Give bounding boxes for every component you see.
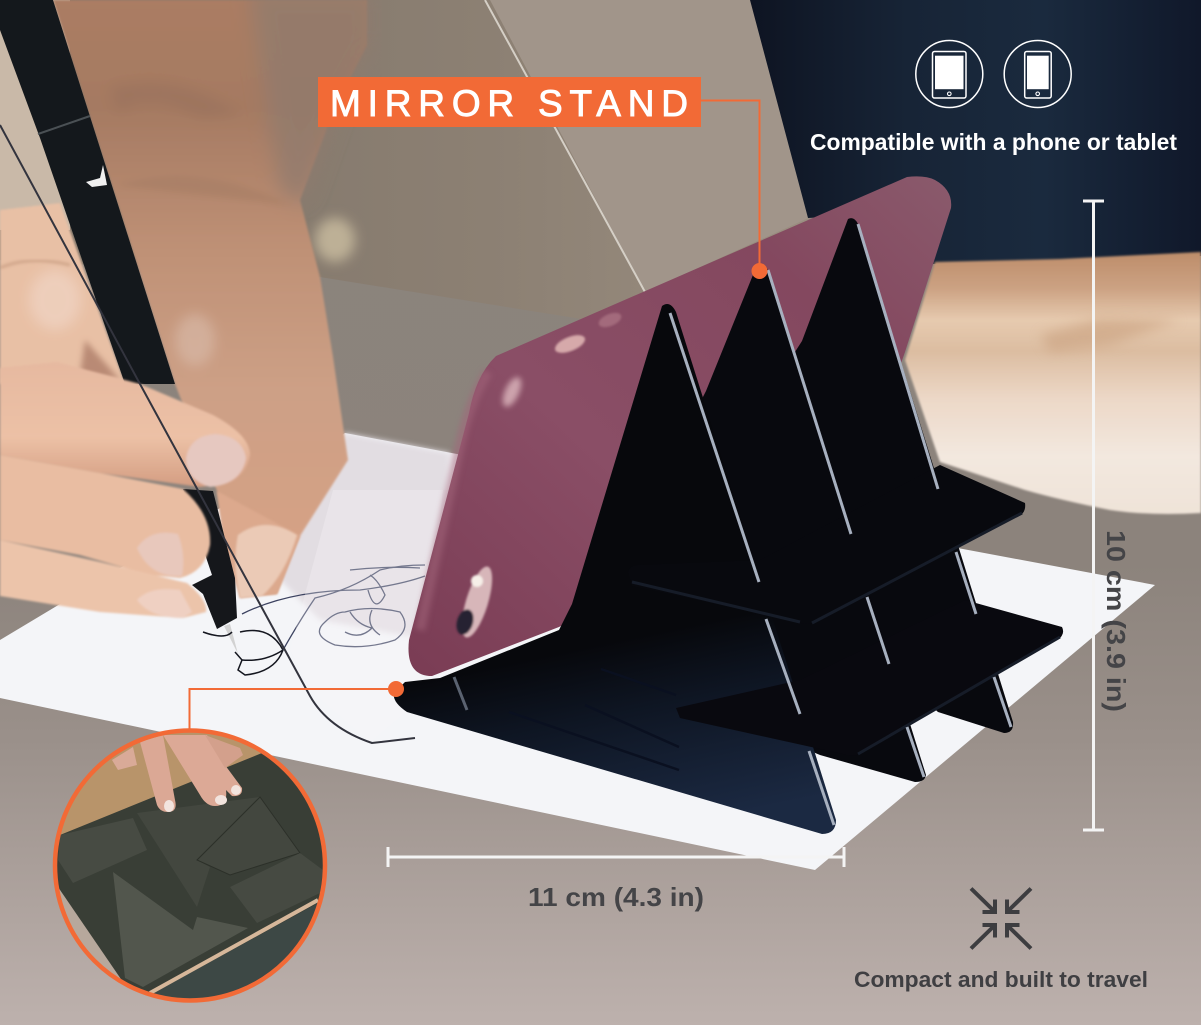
drawing pen upper barrel <box>0 0 175 384</box>
icon: phone <box>1004 40 1071 108</box>
back triangle <box>700 218 1013 733</box>
callout: mirror stand label: MIRROR STAND <box>330 83 688 124</box>
fingers in inset <box>140 735 176 812</box>
plate edges <box>632 513 1060 754</box>
sheet of paper <box>0 433 1155 870</box>
front triangle <box>394 304 836 834</box>
flower sketch <box>203 565 425 675</box>
height label: 10 cm (3.9 in) <box>1101 530 1131 712</box>
wood table <box>60 732 262 835</box>
triangle edge highlights <box>454 224 1011 825</box>
back of hand and forearm <box>53 0 375 598</box>
inset: flat-packed stand photo <box>50 725 330 1005</box>
leader line to phone rest <box>701 100 768 279</box>
fingers <box>0 362 250 618</box>
phone camera <box>454 563 498 641</box>
lower plate <box>676 600 1063 756</box>
ring finger <box>0 540 206 618</box>
icon: tablet <box>916 40 983 108</box>
leader line to inset <box>190 681 404 732</box>
palm <box>0 203 125 384</box>
middle finger <box>0 455 210 578</box>
acrylic glass sheet <box>0 0 645 743</box>
middle triangle <box>600 263 926 782</box>
thumb <box>217 491 300 598</box>
phone buttons <box>553 332 587 356</box>
compatibility caption: Compatible with a phone or tablet <box>810 129 1177 155</box>
foam pieces <box>58 818 147 883</box>
phone <box>408 176 951 676</box>
width label: 11 cm (4.3 in) <box>528 882 704 912</box>
mirror stand <box>394 218 1063 834</box>
compact caption: Compact and built to travel <box>854 967 1148 992</box>
drawing pen tip <box>183 489 238 654</box>
icon: compact arrows <box>971 888 1031 948</box>
shirt <box>750 0 1201 264</box>
slot details <box>509 669 679 770</box>
index finger <box>0 362 250 487</box>
upper plate <box>628 465 1025 624</box>
dimension: height <box>1083 201 1131 830</box>
dimension: width <box>388 847 844 912</box>
right hand <box>905 252 1201 514</box>
